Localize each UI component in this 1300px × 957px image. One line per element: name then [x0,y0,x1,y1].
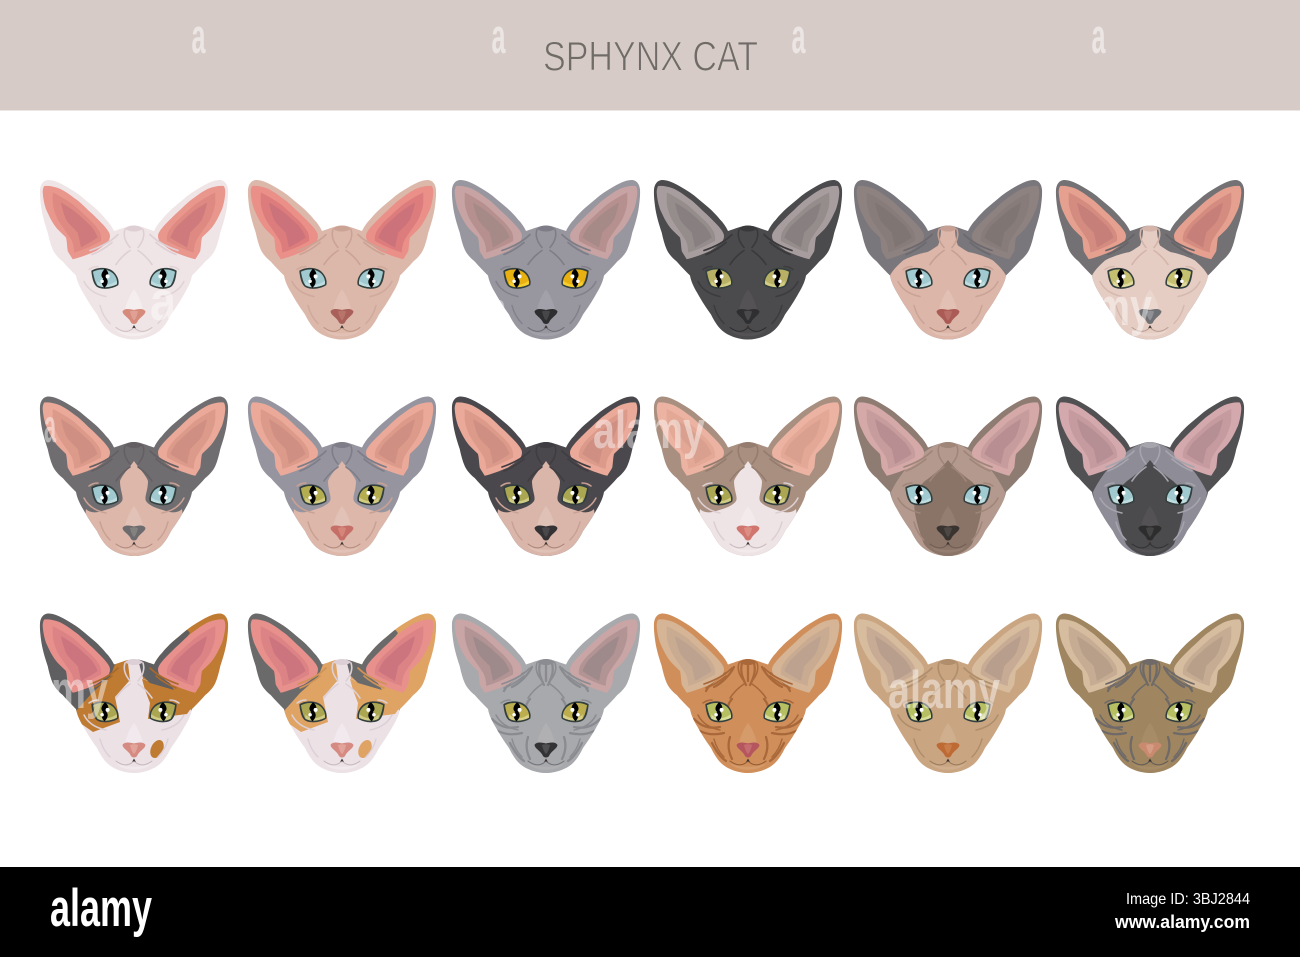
cat 12: seal point [1056,396,1244,568]
features [251,619,433,770]
image watermarks over cats: alamy [1040,278,1152,337]
silhouette [452,180,640,340]
dark muzzle shield [914,460,982,556]
cat 16: ginger tabby [654,613,842,773]
header watermark marks: a [792,10,806,64]
image watermarks over cats: a [44,400,56,452]
tabby stripes [492,661,600,761]
face colour patch [700,461,796,556]
features [1059,402,1241,553]
cat 4: black [654,180,842,340]
header watermark marks [192,10,1106,64]
lighter head band [1093,442,1207,568]
cat 13: tortoiseshell dark [35,610,232,773]
face colour patch [890,226,1006,340]
header watermark marks: a [192,10,206,64]
lighter head band [891,443,1005,556]
silhouette [654,396,842,556]
image watermarks over cats: a [150,269,177,332]
features [43,186,225,336]
features [657,402,839,553]
website: www.alamy.com [1114,912,1250,932]
cat 6: cream face, grey ear rim [1056,180,1244,352]
face colour patch [294,461,390,556]
features [455,186,637,336]
silhouette [248,396,436,556]
header watermark marks: a [1092,10,1106,64]
silhouette [854,613,1042,773]
features [857,402,1039,553]
cat 11: chocolate point [854,396,1042,568]
face colour patch [86,461,182,556]
silhouette [654,613,842,773]
features [657,186,839,336]
cat 15: silver tabby [452,613,640,773]
features [857,186,1039,336]
cat 17: fawn [854,613,1042,773]
image watermarks over cats: alamy [593,401,705,460]
cat 18: brown tabby [1056,613,1244,773]
silhouette [1056,180,1244,340]
silhouette [452,396,640,556]
silhouette [248,180,436,340]
image watermarks over cats: alamy [888,661,1000,720]
tabby stripes [1096,661,1204,761]
silhouette [248,613,436,773]
tabby stripes [694,661,802,761]
image watermarks over cats: a [492,283,506,335]
silhouette [654,180,842,340]
face colour patch [498,461,594,556]
dark muzzle shield [1116,460,1184,556]
header band [0,0,1300,110]
cat 9: black mask [452,396,640,563]
cat 14: calico light [243,610,440,773]
cat 10: brown mask, white blaze [654,396,842,563]
features [455,619,637,770]
cat 3: blue grey with amber eyes [452,180,640,340]
footer bar [0,867,1300,957]
cat 7: grey mask [40,396,228,563]
header watermark marks: a [492,10,506,64]
cat 2: pink nude [248,180,436,340]
calico patches [243,610,440,760]
silhouette [40,180,228,340]
footer logo: alamy [50,879,152,938]
image watermarks over cats: alamy [0,661,108,720]
silhouette [1056,613,1244,773]
features [1059,186,1241,336]
features [251,402,433,553]
features [251,186,433,336]
features [43,619,225,770]
features [455,402,637,553]
features [43,402,225,553]
calico patches [35,610,232,760]
cat 5: grey ears, pink face [854,180,1042,352]
features [1059,619,1241,770]
cat 8: blue-grey mask [248,396,436,563]
silhouette [452,613,640,773]
cat 1: white [40,180,228,340]
silhouette [854,396,1042,556]
silhouette [40,613,228,773]
silhouette [1056,396,1244,556]
image id: Image ID: 3BJ2844 [1126,891,1250,908]
features [657,619,839,770]
title: SPHYNX CAT [543,32,758,80]
face colour patch [1092,226,1208,340]
image watermarks over cats: a [792,283,806,335]
silhouette [854,180,1042,340]
image watermarks over cats [0,269,1152,720]
features [857,619,1039,770]
silhouette [40,396,228,556]
